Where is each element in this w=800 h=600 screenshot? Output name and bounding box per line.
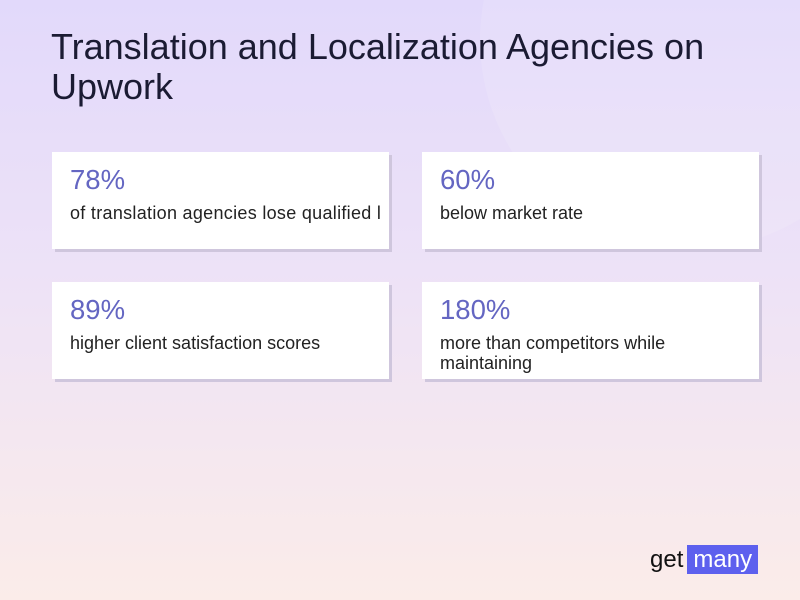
- panel: stat 180%: [422, 282, 759, 379]
- logo: [650, 545, 758, 574]
- panel: stat 180%: 180%: [440, 294, 510, 325]
- panel: stat 78%: [52, 152, 389, 249]
- panel: stat 60%: 60%: [440, 164, 495, 195]
- logo: get: [650, 546, 683, 573]
- panel: stat 89%: 89%: [70, 294, 125, 325]
- logo: many: [693, 546, 752, 573]
- title: Translation and Localization Agencies on Upwork: [51, 26, 704, 107]
- panel: stat 78%: 78%: [70, 164, 125, 195]
- panel: stat 89%: higher client satisfaction scores: [70, 333, 320, 353]
- panel: stat 60%: [422, 152, 759, 249]
- panel: stat 60%: below market rate: [440, 203, 583, 223]
- panel: stat 78%: of translation agencies lose qualified l: [70, 203, 381, 223]
- panel: stat 89%: [52, 282, 389, 379]
- panel: stat 180%: more than competitors while maintaining: [440, 333, 665, 373]
